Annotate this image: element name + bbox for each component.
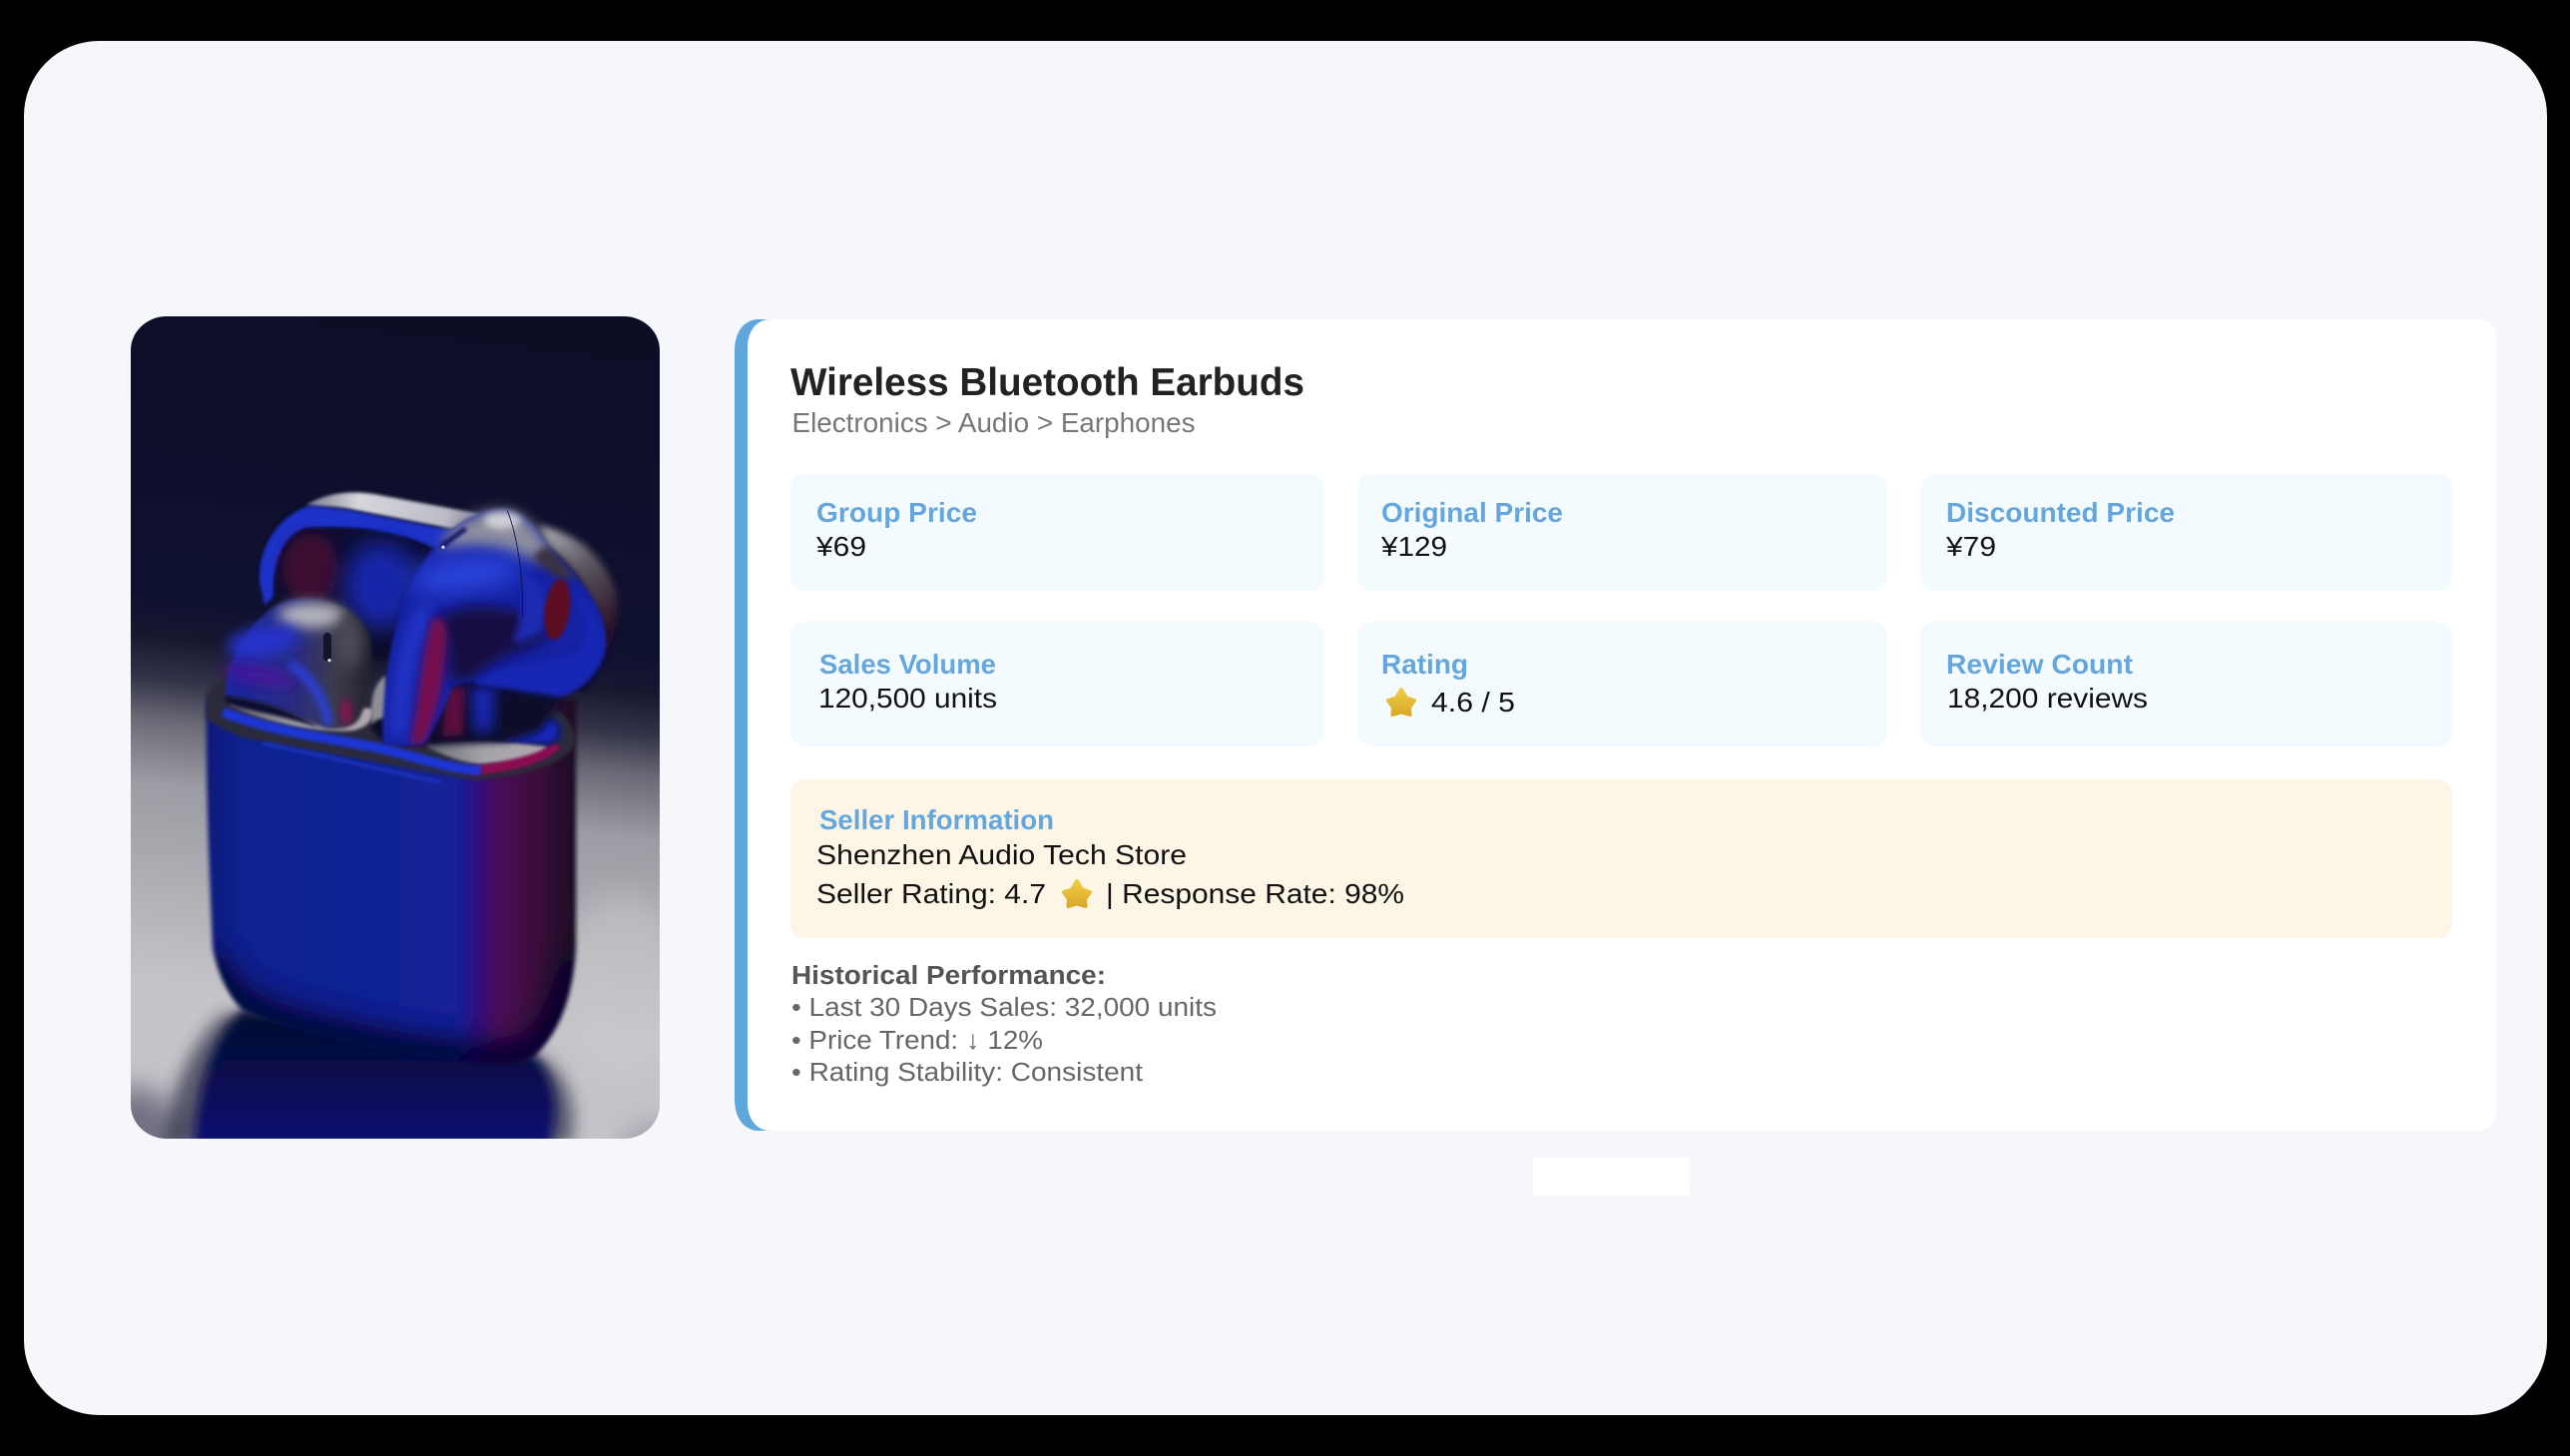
historical performance: • Last 30 Days Sales: 32,000 units xyxy=(791,992,1217,1022)
card: rating: 4.6 / 5 xyxy=(1431,687,1515,718)
category breadcrumb: Electronics > Audio > Earphones xyxy=(792,407,1196,438)
card: review count: 18,200 reviews xyxy=(1947,683,2148,714)
icon: seller star xyxy=(1064,881,1090,906)
card: discounted price: ¥79 xyxy=(1945,531,1996,562)
card: original price: Original Price xyxy=(1381,497,1563,528)
card: discounted price xyxy=(1920,474,2452,591)
case body front xyxy=(205,699,579,1064)
floor shadow xyxy=(165,1013,574,1148)
card: seller information: Shenzhen Audio Tech Store xyxy=(816,839,1187,870)
card: seller information: | Response Rate: 98% xyxy=(1106,878,1404,909)
product image: earbuds in charging case xyxy=(131,316,660,1139)
card: group price: Group Price xyxy=(816,497,977,528)
card: review count: Review Count xyxy=(1946,649,2133,680)
panel: product information xyxy=(735,319,2496,1131)
right earbud xyxy=(382,510,606,745)
card: seller information xyxy=(790,779,2452,938)
icon: star xyxy=(1388,690,1414,715)
card: discounted price: Discounted Price xyxy=(1946,497,2175,528)
case lid xyxy=(259,493,618,692)
card: rating: Rating xyxy=(1381,649,1468,680)
historical performance: • Price Trend: ↓ 12% xyxy=(791,1025,1043,1055)
card: sales volume xyxy=(790,622,1324,746)
card: sales volume: Sales Volume xyxy=(819,649,996,680)
card: original price xyxy=(1357,474,1887,591)
card: seller information: Seller Information xyxy=(819,804,1054,835)
area behind stem xyxy=(425,683,563,750)
card: group price: ¥69 xyxy=(815,531,866,562)
card: original price: ¥129 xyxy=(1380,531,1447,562)
card: rating xyxy=(1357,622,1887,746)
historical performance: Historical Performance: xyxy=(791,960,1106,990)
title: Wireless Bluetooth Earbuds xyxy=(790,361,1304,404)
card: group price xyxy=(790,474,1324,591)
card: seller information: Seller Rating: 4.7 xyxy=(816,878,1046,909)
earbuds, lid and rim group xyxy=(207,493,618,782)
historical performance: • Rating Stability: Consistent xyxy=(791,1057,1144,1087)
card: review count xyxy=(1920,622,2452,746)
left earbud xyxy=(221,599,372,729)
historical performance xyxy=(791,960,1217,1087)
small blank white button xyxy=(1533,1158,1690,1196)
card: sales volume: 120,500 units xyxy=(818,683,997,714)
case rim xyxy=(207,676,575,782)
